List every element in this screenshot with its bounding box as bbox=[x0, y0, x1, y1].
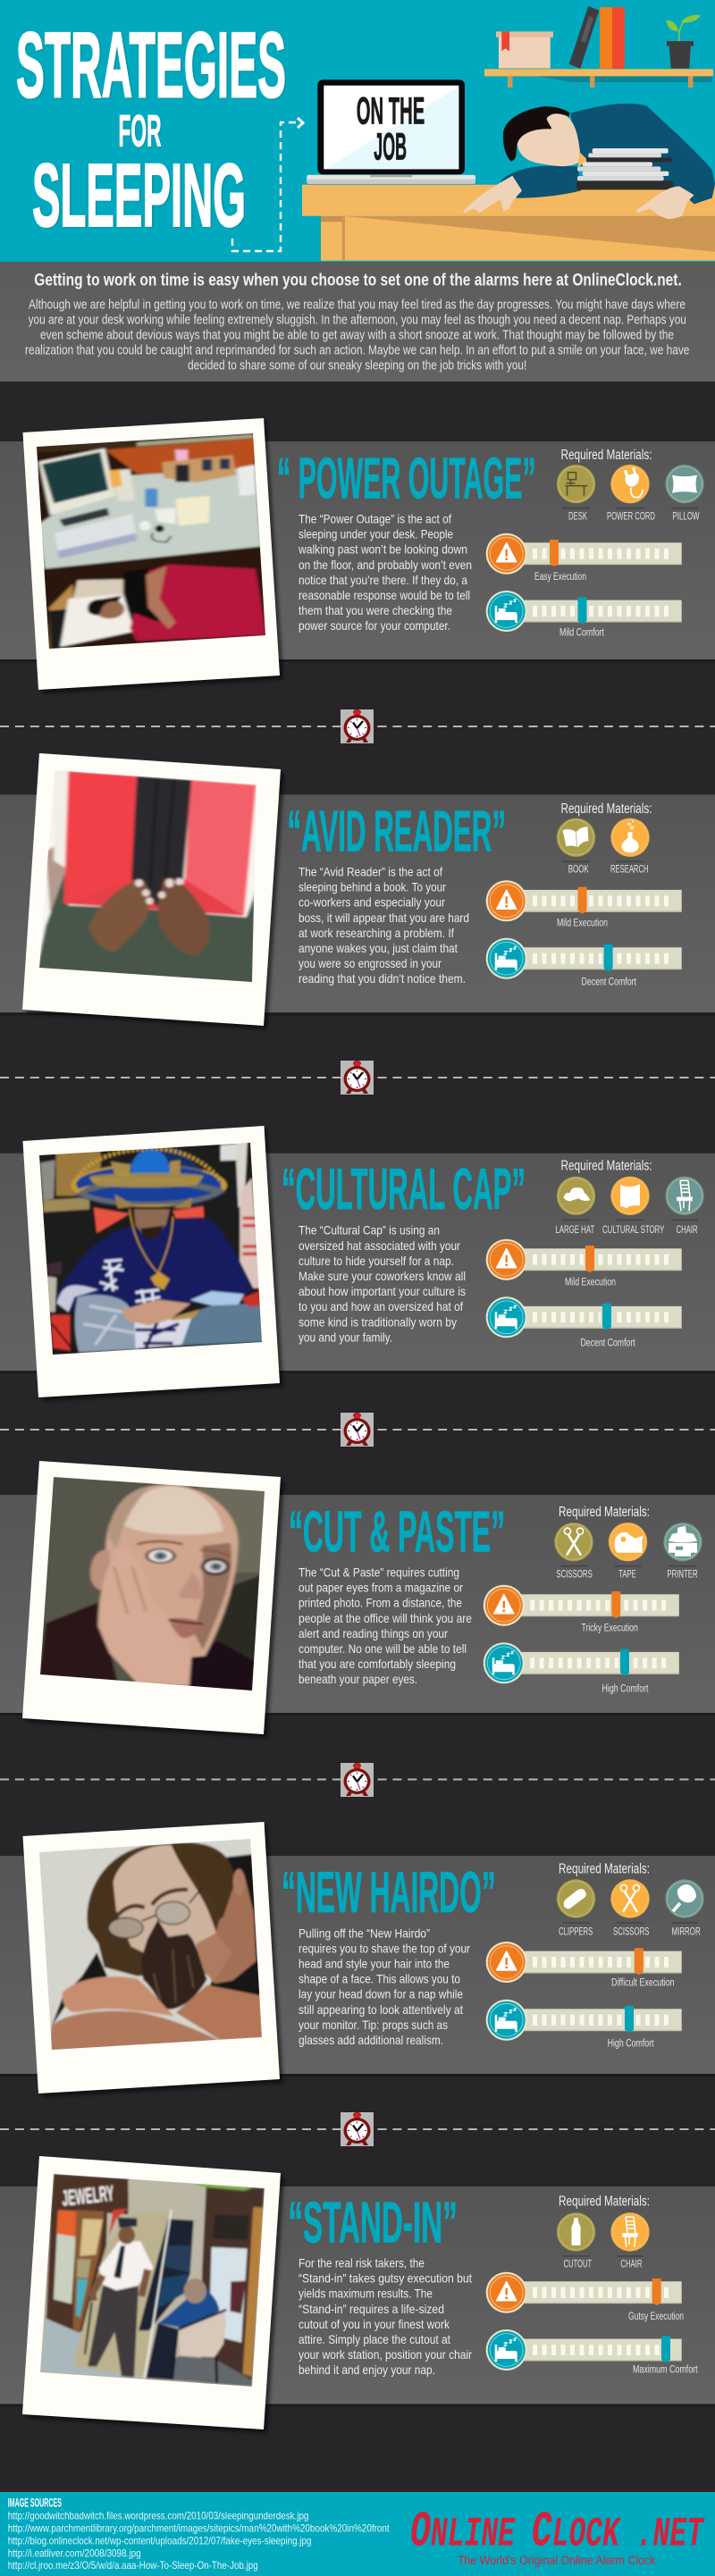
intro band bbox=[0, 262, 715, 382]
illustration: sleeping worker bbox=[463, 104, 715, 219]
icon: desk bbox=[557, 465, 595, 508]
description bbox=[299, 1926, 470, 2047]
required materials: MIRROR bbox=[672, 1925, 701, 1937]
description: that you are comfortably sleeping bbox=[299, 1657, 456, 1671]
panel background bbox=[0, 1154, 715, 1373]
polaroid photo: man sleeping under desk bbox=[23, 418, 283, 693]
description: Pulling off the “New Hairdo” bbox=[299, 1926, 430, 1940]
description: your monitor. Tip: props such as bbox=[299, 2018, 448, 2032]
slider: high comfort: High Comfort bbox=[602, 1684, 649, 1695]
required materials: TAPE bbox=[618, 1568, 636, 1581]
footer bbox=[0, 2492, 715, 2576]
section 3: cultural cap bbox=[0, 1126, 715, 1401]
required materials bbox=[557, 448, 704, 523]
icon: cultural story bbox=[610, 1177, 650, 1220]
description: The “Cut & Paste” requires cutting bbox=[299, 1565, 459, 1580]
image sources: http://cl.jroo.me/z3/O/5/w/d/a.aaa-How-To-Sleep-On-The-Job.jpg bbox=[8, 2559, 258, 2572]
illustration: laptop: ON THE bbox=[357, 89, 425, 132]
description: some kind is traditionally worn by bbox=[299, 1314, 457, 1329]
polaroid photo: person behind red book bbox=[22, 753, 284, 1029]
required materials: CUTOUT bbox=[564, 2258, 593, 2270]
description: to you and how an oversized hat of bbox=[299, 1299, 463, 1313]
required materials: SCISSORS bbox=[556, 1568, 593, 1581]
image sources: http://goodwitchbadwitch.files.wordpress.com/2010/03/sleepingunderdesk.jpg bbox=[8, 2509, 308, 2521]
description bbox=[299, 865, 469, 986]
required materials: PRINTER bbox=[667, 1568, 698, 1581]
required materials bbox=[555, 1158, 704, 1236]
description: beneath your paper eyes. bbox=[299, 1672, 417, 1686]
slider: decent comfort bbox=[486, 1296, 682, 1349]
description: The “Power Outage” is the act of bbox=[299, 511, 451, 525]
description: printed photo. From a distance, the bbox=[299, 1596, 462, 1610]
section 1: power outage bbox=[0, 418, 715, 693]
required materials: Required Materials: bbox=[559, 1505, 650, 1520]
required materials: LARGE HAT bbox=[555, 1223, 595, 1236]
description: The “Cultural Cap” is using an bbox=[299, 1223, 440, 1238]
polaroid photo: man with paper eyes bbox=[22, 1461, 284, 1738]
icon: alarm clock bbox=[341, 1763, 374, 1797]
required materials: RESEARCH bbox=[610, 863, 649, 876]
icon: alarm clock bbox=[341, 2112, 374, 2146]
icon: book bbox=[557, 818, 595, 861]
required materials: BOOK bbox=[568, 863, 589, 876]
required materials: CULTURAL STORY bbox=[602, 1223, 664, 1236]
divider with clock bbox=[0, 709, 715, 743]
icon: clippers bbox=[557, 1879, 595, 1923]
header: STRATEGIES bbox=[16, 14, 286, 118]
description: For the real risk takers, the bbox=[299, 2255, 425, 2270]
icon: cutout bbox=[557, 2212, 595, 2256]
slider: easy execution bbox=[486, 533, 682, 583]
slider: mild execution: Mild Execution bbox=[557, 919, 608, 929]
description: you were so engrossed in your bbox=[299, 956, 442, 970]
description: cutout of you in your finest work bbox=[299, 2317, 450, 2331]
intro paragraph bbox=[25, 298, 689, 373]
panel background bbox=[0, 441, 715, 662]
icon: mirror bbox=[665, 1879, 704, 1923]
description: oversized hat associated with your bbox=[299, 1238, 460, 1253]
required materials: Required Materials: bbox=[559, 1862, 650, 1877]
required materials: Required Materials: bbox=[561, 1158, 652, 1174]
description: reasonable response would be to tell bbox=[299, 588, 470, 602]
description: computer. No one will be able to tell bbox=[299, 1641, 467, 1656]
required materials: CHAIR bbox=[677, 1223, 698, 1236]
icon: alarm clock bbox=[341, 1413, 374, 1447]
description: Make sure your coworkers know all bbox=[299, 1269, 466, 1283]
description: “Stand-in” takes gutsy execution but bbox=[299, 2271, 472, 2286]
panel background bbox=[0, 1856, 715, 2077]
image sources: http://i.eatliver.com/2008/3098.jpg bbox=[8, 2547, 141, 2560]
required materials: PILLOW bbox=[672, 510, 700, 523]
slider: mild comfort bbox=[486, 591, 682, 639]
description: sleeping behind a book. To your bbox=[299, 880, 446, 894]
slider: mild execution bbox=[486, 1239, 682, 1288]
polaroid photo: man in sombrero bbox=[23, 1126, 283, 1401]
section 5: new hairdo: “NEW HAIRDO” bbox=[282, 1859, 496, 1925]
logo: online clock: The World's Original Online Alarm Clock bbox=[458, 2554, 656, 2567]
description bbox=[299, 1223, 466, 1344]
description: boss, it will appear that you are hard bbox=[299, 910, 469, 925]
icon: alarm clock bbox=[341, 1061, 374, 1095]
divider with clock bbox=[0, 1763, 715, 1797]
required materials: Required Materials: bbox=[561, 801, 652, 817]
title: SLEEPING bbox=[32, 146, 246, 246]
description: head and style your hair into the bbox=[299, 1957, 450, 1971]
icon: pillow bbox=[665, 465, 704, 508]
slider: decent comfort: Decent Comfort bbox=[581, 1338, 635, 1349]
description: still appearing to look attentively at bbox=[299, 2002, 463, 2017]
illustration: shelf with books and plant bbox=[484, 6, 713, 88]
required materials bbox=[557, 801, 652, 876]
description: lay your head down for a nap while bbox=[299, 1987, 463, 2001]
slider: easy execution: Easy Execution bbox=[534, 572, 586, 583]
description bbox=[298, 511, 472, 633]
slider: high comfort bbox=[484, 1642, 679, 1695]
required materials: CHAIR bbox=[620, 2258, 643, 2270]
description: on the floor, and probably won’t even bbox=[299, 558, 472, 572]
description: culture to hide yourself for a nap. bbox=[299, 1254, 454, 1268]
divider with clock bbox=[0, 1413, 715, 1447]
panel background bbox=[0, 1495, 715, 1716]
slider: gutsy execution: Gutsy Execution bbox=[628, 2312, 684, 2322]
title: FOR bbox=[118, 105, 161, 155]
description: co-workers and especially your bbox=[299, 895, 445, 910]
slider: tricky execution: Tricky Execution bbox=[581, 1624, 638, 1634]
polaroid photo: man with shaved hairdo face bbox=[23, 1822, 283, 2097]
description: notice that you’re there. If they do, a bbox=[299, 573, 467, 587]
title: stand-in: “STAND-IN” bbox=[288, 2189, 458, 2254]
slider: high comfort: High Comfort bbox=[608, 2039, 654, 2050]
slider: maximum comfort bbox=[486, 2329, 698, 2375]
slider: mild execution: Mild Execution bbox=[565, 1277, 616, 1288]
slider: mild comfort: Mild Comfort bbox=[559, 628, 605, 639]
divider with clock bbox=[0, 1061, 715, 1095]
divider with clock bbox=[0, 2112, 715, 2146]
icon: power cord bbox=[610, 465, 650, 508]
image sources: http://www.parchmentlibrary.org/parchment/images/sitepics/man%20with%20book%20in%20front bbox=[8, 2521, 390, 2534]
description: power source for your computer. bbox=[299, 618, 450, 633]
icon: scissors bbox=[554, 1523, 593, 1566]
description bbox=[299, 1565, 472, 1686]
description: alert and reading things on your bbox=[299, 1626, 448, 1640]
required materials bbox=[554, 1505, 702, 1581]
description: about how important your culture is bbox=[299, 1284, 466, 1298]
slider: high comfort bbox=[486, 2000, 682, 2050]
description: attire. Simply place the cutout at bbox=[299, 2332, 450, 2346]
description: walking past won’t be looking down bbox=[298, 542, 467, 557]
description: The “Avid Reader” is the act of bbox=[299, 865, 442, 879]
slider: maximum comfort: Maximum Comfort bbox=[633, 2364, 698, 2375]
section 5: new hairdo bbox=[0, 1822, 715, 2097]
required materials bbox=[557, 1862, 704, 1937]
title: SLEEPING bbox=[34, 147, 247, 247]
section 6: stand-in bbox=[0, 2156, 715, 2433]
illustration: desk bbox=[302, 185, 715, 261]
description: glasses add additional realism. bbox=[299, 2033, 443, 2047]
required materials: Required Materials: bbox=[561, 448, 652, 463]
description: your work station, position your chair bbox=[299, 2347, 472, 2362]
slider: decent comfort: Decent Comfort bbox=[581, 978, 637, 988]
title bbox=[16, 14, 288, 247]
description: out paper eyes from a magazine or bbox=[299, 1581, 463, 1595]
slider: difficult execution bbox=[486, 1942, 682, 1989]
icon: chair bbox=[610, 2212, 650, 2256]
illustration: laptop: JOB bbox=[374, 125, 407, 168]
icon: tape bbox=[609, 1523, 647, 1566]
icon: scissors bbox=[610, 1879, 650, 1923]
required materials: Required Materials: bbox=[559, 2194, 650, 2210]
title: FOR bbox=[120, 107, 163, 157]
icon: research flask bbox=[610, 818, 650, 861]
required materials: DESK bbox=[568, 510, 587, 523]
dashed arrow bbox=[232, 118, 303, 251]
required materials: CLIPPERS bbox=[559, 1925, 593, 1937]
description: sleeping under your desk. People bbox=[299, 527, 453, 541]
panel background bbox=[0, 2186, 715, 2407]
header: STRATEGIES bbox=[18, 14, 288, 118]
description bbox=[299, 2255, 472, 2377]
panel background bbox=[0, 794, 715, 1015]
description: behind it and enjoy your nap. bbox=[299, 2362, 435, 2377]
description: anyone wakes you, just claim that bbox=[299, 941, 458, 955]
icon: printer bbox=[663, 1523, 702, 1566]
description: you and your family. bbox=[299, 1330, 392, 1344]
description: shape of a face. This allows you to bbox=[299, 1972, 460, 1986]
illustration: laptop bbox=[307, 80, 475, 184]
slider: difficult execution: Difficult Execution bbox=[611, 1978, 675, 1989]
header bbox=[0, 0, 715, 262]
description: requires you to shave the top of your bbox=[299, 1941, 470, 1955]
icon: chair bbox=[665, 1177, 704, 1220]
required materials: POWER CORD bbox=[607, 510, 655, 523]
image sources: http://blog.onlineclock.net/wp-content/uploads/2012/07/fake-eyes-sleeping.jpg bbox=[8, 2535, 311, 2547]
icon: large hat bbox=[557, 1177, 595, 1220]
slider: decent comfort bbox=[486, 938, 682, 988]
section 4: cut and paste bbox=[0, 1461, 715, 1738]
slider: tricky execution bbox=[484, 1585, 679, 1634]
description: them that you were checking the bbox=[299, 603, 452, 617]
intro paragraph: decided to share some of our sneaky sleeping on the job tricks with you! bbox=[188, 358, 526, 373]
required materials: SCISSORS bbox=[613, 1925, 649, 1937]
polaroid photo: security guard cutout stand-in: JEWELRY bbox=[61, 2182, 115, 2211]
slider: mild execution bbox=[486, 880, 682, 929]
section 2: avid reader bbox=[0, 753, 715, 1029]
image sources: IMAGE SOURCES bbox=[8, 2496, 62, 2510]
slider: gutsy execution bbox=[486, 2272, 684, 2322]
description: reading that you didn’t notice them. bbox=[299, 971, 466, 986]
required materials bbox=[557, 2194, 650, 2270]
description: “Stand-in” requires a life-sized bbox=[299, 2302, 444, 2316]
icon: alarm clock bbox=[341, 709, 374, 743]
description: yields maximum results. The bbox=[299, 2287, 433, 2301]
image sources bbox=[8, 2496, 390, 2572]
polaroid photo: security guard cutout stand-in bbox=[22, 2156, 284, 2433]
description: at work researching a problem. If bbox=[299, 926, 454, 940]
description: people at the office will think you are bbox=[299, 1611, 472, 1625]
